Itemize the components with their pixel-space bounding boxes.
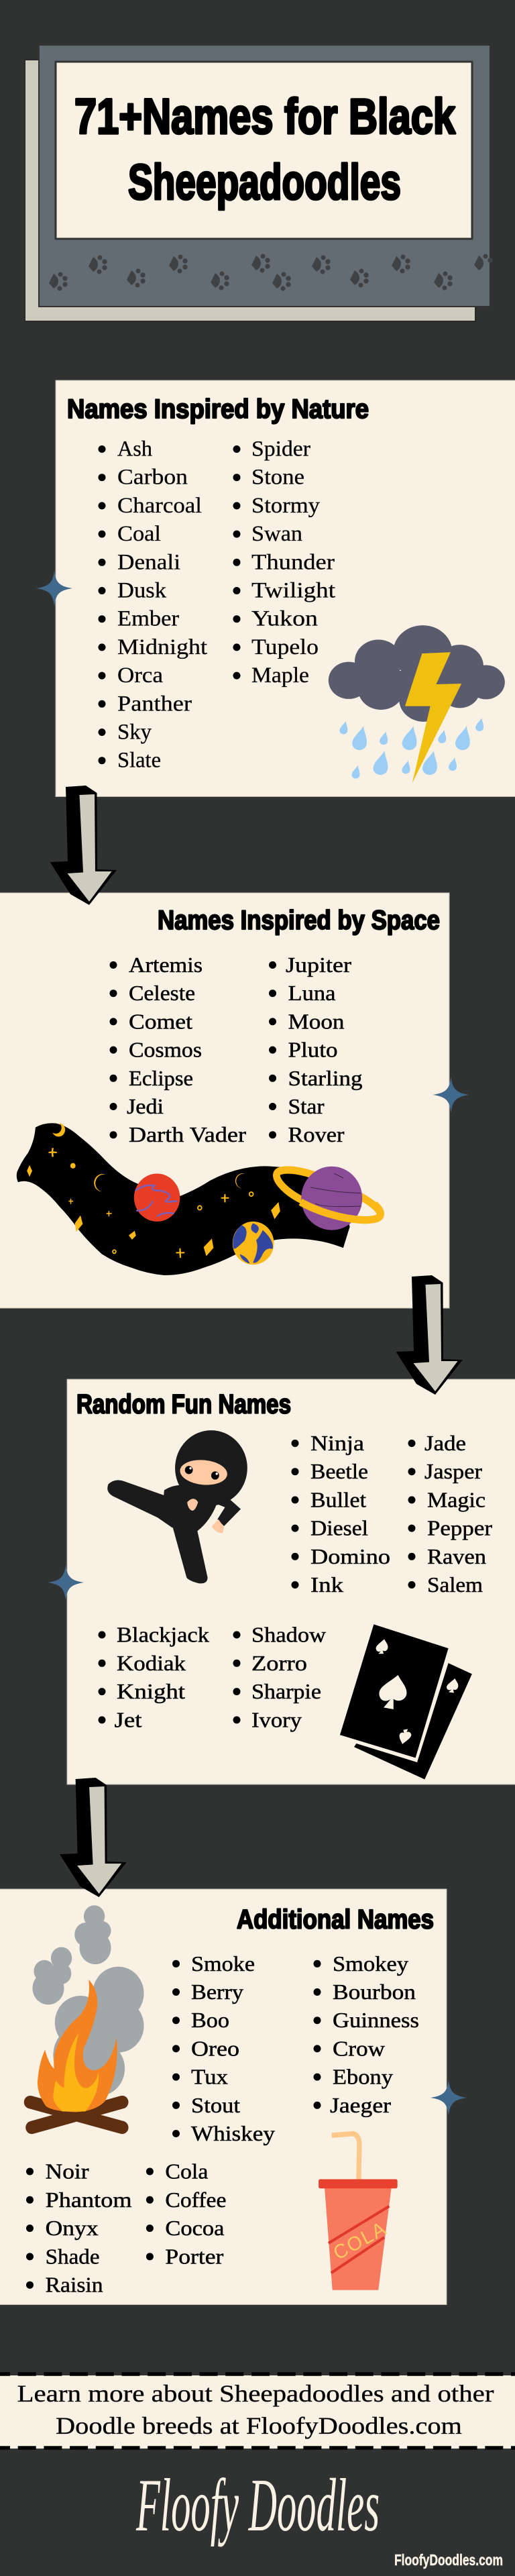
list: nature column one: Ember [117,607,179,631]
list: space column two: Star [288,1094,325,1118]
title: Sheepadoodles [128,154,401,210]
list: nature column two: Stormy [251,494,321,518]
heading: additional names: Additional Names [237,1905,434,1935]
footer text: Learn more about Sheepadoodles and other [17,2380,494,2407]
panel: names inspired by space [0,893,449,1308]
list: nature column one: Midnight [117,635,207,659]
panel: random fun names [67,1379,515,1784]
list: nature column one: Denali [117,550,180,574]
list: fun names upper column two: Salem [427,1572,483,1597]
list: fun names lower column one [98,1622,209,1731]
illustration: galaxy ribbon with planets [17,1123,381,1275]
list: additional names lower column one [26,2159,132,2297]
list: nature column two: Maple [251,663,309,688]
list: nature column two: Thunder [251,550,335,574]
list: fun names upper column two: Jade [424,1431,466,1455]
list: additional names lower column one: Onyx [46,2216,99,2240]
list: space column one: Cosmos [129,1038,202,1062]
list: additional names lower column two: Cola [165,2159,208,2183]
list: space column two: Moon [288,1009,345,1033]
footer text [17,2380,494,2439]
heading: nature: Names Inspired by Nature [67,394,369,424]
list: additional names upper column one: Oreo [191,2036,239,2060]
paw print row [49,254,493,291]
arrow: space to fun names [396,1275,463,1395]
list: nature column one: Coal [117,522,161,546]
list: fun names lower column two: Sharpie [251,1679,321,1703]
list: nature column two: Stone [251,466,304,490]
list: space column one: Artemis [129,953,203,977]
list: nature column one: Sky [117,720,152,745]
list: nature column one [98,437,207,773]
list: nature column one: Charcoal [117,494,202,518]
footer text: Doodle breeds at FloofyDoodles.com [56,2412,462,2439]
list: nature column two: Twilight [251,578,335,602]
heading: space: Names Inspired by Space [158,906,440,935]
list: nature column two: Yukon [251,607,318,631]
list: nature column two: Spider [251,437,310,462]
footer banner: learn more [0,2374,515,2449]
list: space column two: Rover [288,1122,345,1146]
list: fun names upper column one [291,1431,390,1597]
list: fun names upper column one: Beetle [310,1459,368,1483]
illustration: campfire with smoke [30,1905,144,2127]
list: fun names lower column one: Jet [114,1707,142,1731]
list: nature column one: Dusk [117,578,167,602]
list: space column one: Jedi [127,1094,164,1118]
illustration: cola cup: COLA [330,2217,390,2265]
icon: sparkle star right of space panel [433,1077,469,1113]
list: nature column one: Ash [117,437,152,462]
list: space column two: Pluto [288,1038,338,1062]
list: additional names upper column one: Tux [191,2065,228,2089]
list: fun names lower column two: Ivory [251,1707,302,1731]
list: additional names upper column one [172,1951,275,2145]
list: additional names upper column two: Ebony [333,2065,393,2089]
list: fun names upper column two [408,1431,492,1597]
icon: storm cloud with lightning and rain [329,625,505,783]
list: fun names upper column two: Raven [427,1544,486,1568]
list: additional names lower column two: Coffee [165,2188,226,2212]
icon: sparkle star left of nature panel [36,570,72,606]
icon: playing cards [340,1624,472,1780]
panel: additional names [0,1889,447,2305]
list: nature column one: Carbon [117,466,188,490]
illustration: cola cup [319,2134,398,2290]
list: space column two: Starling [288,1066,362,1090]
icon: sparkle star right of additional names panel [431,2080,467,2116]
icon: sparkle star left of fun names panel [48,1564,84,1601]
list: fun names upper column one: Domino [310,1544,390,1568]
list: additional names upper column one: Stout [191,2093,240,2117]
list: fun names upper column one: Ninja [310,1431,364,1455]
list: space column one: Celeste [129,981,195,1005]
list: additional names lower column one: Noir [46,2159,89,2183]
list: additional names upper column two [314,1951,419,2117]
list: fun names lower column two [233,1622,326,1731]
list: space column one: Comet [129,1009,192,1033]
list: additional names upper column two: Smokey [333,1951,408,1976]
list: fun names lower column two: Zorro [251,1651,307,1675]
list: fun names upper column one: Diesel [310,1516,368,1540]
list: nature column two [233,437,335,688]
list: fun names upper column two: Magic [427,1487,485,1511]
list: additional names upper column one: Boo [191,2008,229,2032]
list: fun names upper column one: Bullet [310,1487,366,1511]
list: space column two: Luna [288,981,335,1005]
list: additional names upper column one: Berry [191,1980,243,2004]
list: fun names lower column two: Shadow [251,1622,326,1646]
list: fun names upper column two: Pepper [427,1516,492,1540]
list: additional names upper column two: Bourbon [333,1980,416,2004]
list: additional names lower column two: Porter [165,2244,224,2268]
panel: names inspired by nature [56,380,515,797]
list: nature column two: Swan [251,522,302,546]
arrow: nature to space [50,786,117,905]
list: additional names lower column two: Cocoa [165,2216,224,2240]
list: additional names upper column two: Crow [333,2036,385,2060]
list: fun names upper column one: Ink [310,1572,343,1597]
title [74,89,456,210]
list: additional names lower column one: Phantom [46,2188,132,2212]
list: fun names lower column one: Kodiak [117,1651,186,1675]
list: additional names upper column two: Jaeger [330,2093,391,2117]
list: nature column one: Slate [117,749,161,773]
list: nature column one: Orca [117,663,163,688]
panel: title card [25,45,493,321]
list: space column one: Darth Vader [129,1122,246,1146]
list: nature column one: Panther [117,692,192,716]
list: space column one: Eclipse [129,1066,193,1090]
list: space column one [110,953,246,1146]
list: space column two [269,953,362,1146]
list: space column two: Jupiter [286,953,351,977]
list: additional names upper column one: Whiskey [191,2121,275,2145]
list: additional names lower column one: Shade [46,2244,100,2268]
list: additional names lower column one: Raisin [46,2273,103,2297]
arrow: fun names to additional names [60,1778,127,1897]
heading: random fun names: Random Fun Names [76,1390,291,1419]
list: fun names lower column one: Blackjack [117,1622,209,1646]
list: fun names upper column two: Jasper [424,1459,482,1483]
list: additional names lower column two [146,2159,226,2268]
list: additional names upper column two: Guinness [333,2008,419,2032]
illustration: kicking ninja [107,1430,247,1583]
list: nature column two: Tupelo [251,635,319,659]
list: fun names lower column one: Knight [117,1679,185,1703]
list: additional names upper column one: Smoke [191,1951,255,1976]
